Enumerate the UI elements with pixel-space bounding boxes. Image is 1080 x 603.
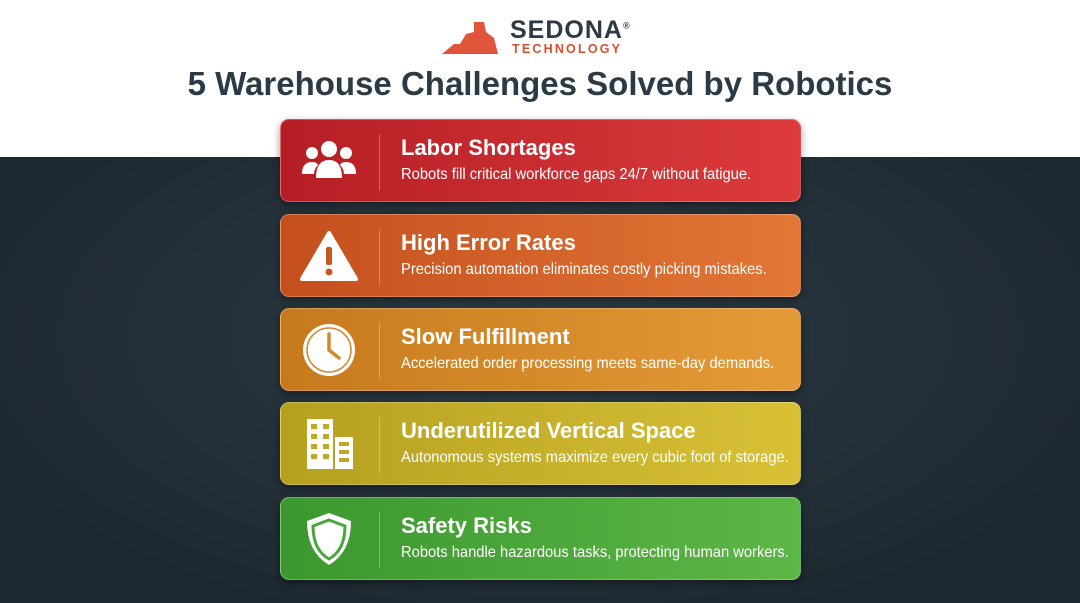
card: vertical space: Autonomous systems maximize every cubic foot of storage. [401,449,789,466]
card: slow fulfillment: Slow Fulfillment [401,324,570,349]
card: safety risks: Safety Risks [401,513,532,538]
card: safety risks: Robots handle hazardous tasks, protecting human workers. [401,544,789,561]
card: vertical space: Underutilized Vertical Space [401,418,696,443]
card: high error rates: High Error Rates [401,230,576,255]
card: high error rates [280,214,801,297]
logo: SEDONA® [510,16,631,44]
card: labor shortages: Labor Shortages [401,135,576,160]
logo: TECHNOLOGY [512,42,622,56]
logo [442,16,631,56]
card: slow fulfillment [280,308,801,391]
card: slow fulfillment: Accelerated order processing meets same-day demands. [401,355,774,372]
icon: shield [307,513,351,565]
card: safety risks [280,497,801,580]
card: vertical space [280,402,801,485]
icon: people [302,141,356,178]
icon: warning [300,230,358,281]
card: labor shortages [280,119,801,202]
icon: clock [303,324,355,376]
icon: buildings [307,419,353,469]
card: labor shortages: Robots fill critical workforce gaps 24/7 without fatigue. [401,166,751,183]
title: 5 Warehouse Challenges Solved by Robotics [188,65,892,102]
card: high error rates: Precision automation eliminates costly picking mistakes. [401,261,767,278]
